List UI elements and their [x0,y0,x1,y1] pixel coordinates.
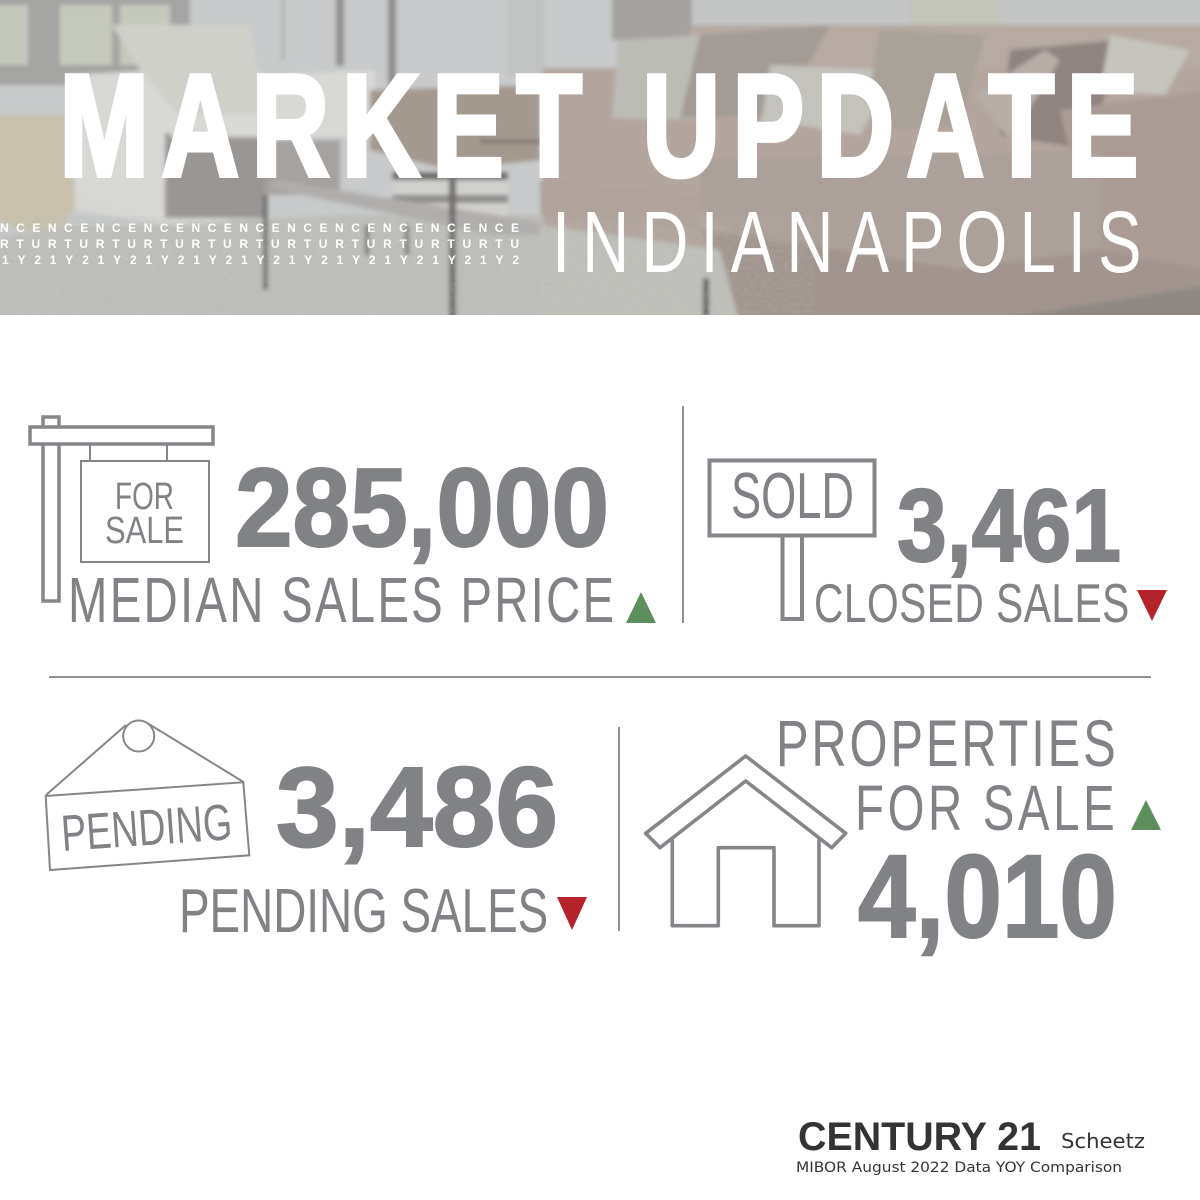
icon: for sale sign [30,417,213,601]
footer: logo: CENTURY 21 [798,1115,1041,1159]
panel: properties for sale [646,707,1161,963]
icon: sold sign: SOLD [731,459,854,532]
footer: source note: MIBOR August 2022 Data YOY Comparison [796,1160,1122,1176]
icon: pending sign [46,720,249,870]
value: 3,486: 3,486 [276,744,558,870]
decorative ticker text: 1Y21Y21Y21Y21Y21Y21Y21Y21Y21Y21Y2 [2,253,519,267]
label: pending sales: PENDING SALES [179,876,548,946]
icon: pending sign: PENDING [59,793,234,862]
divider [682,406,684,623]
label: closed sales: CLOSED SALES [814,573,1129,635]
value: 3,461: 3,461 [897,468,1121,583]
title [60,46,1138,207]
panel: closed sales [710,459,1167,635]
divider [618,727,620,931]
decorative ticker text: NCENCENCENCENCENCENCENCENCENCENCE [0,221,519,235]
icon: for sale sign: FOR [115,476,174,518]
subtitle: Indianapolis: INDIANAPOLIS [552,194,1142,291]
arrow: up [626,592,656,623]
divider [49,676,1151,678]
value: 4,010: 4,010 [858,831,1117,963]
panel: median sales price [30,417,656,636]
header photo banner [0,0,1200,325]
icon: sold sign [710,459,874,619]
label: for sale: FOR SALE [855,772,1115,844]
title: UPDATE [642,46,1138,207]
decorative ticker text: RTURTURTURTURTURTURTURTURTURTURTU [0,237,519,251]
arrow: up [1131,800,1161,830]
icon: house [646,756,846,926]
panel: pending sales [46,720,587,946]
title: MARKET [60,46,582,207]
label: properties: PROPERTIES [776,707,1116,781]
icon: for sale sign: SALE [105,510,184,552]
footer: logo: Scheetz [1061,1129,1145,1153]
arrow: down [557,897,587,930]
label: median sales price: MEDIAN SALES PRICE [68,564,614,636]
decorative ticker text [0,221,519,267]
value: 285,000: 285,000 [235,446,609,570]
arrow: down [1137,590,1167,621]
